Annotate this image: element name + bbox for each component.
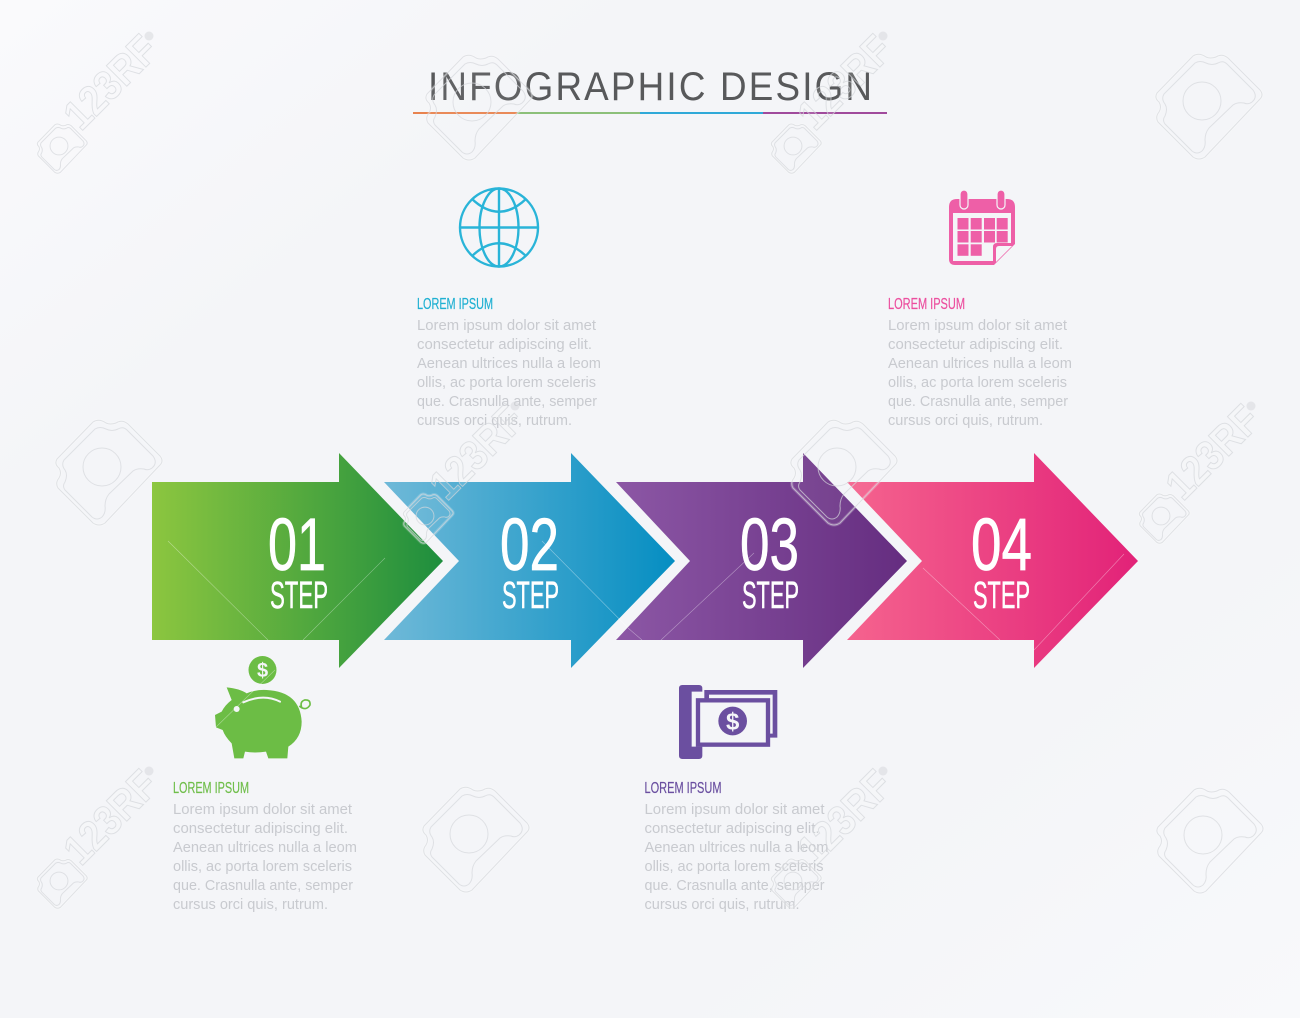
text block: step 02	[417, 296, 601, 429]
arrow: step 01: STEP	[270, 575, 328, 617]
text block: step 04: cursus orci quis, rutrum.	[888, 412, 1043, 429]
text block: step 03: ollis, ac porta lorem sceleris	[644, 858, 824, 875]
text block: step 02: ollis, ac porta lorem sceleris	[417, 374, 596, 391]
text block: step 04: ollis, ac porta lorem sceleris	[888, 374, 1067, 391]
text block: step 03: Lorem ipsum dolor sit amet	[644, 801, 825, 818]
text block: step 03	[644, 780, 828, 913]
arrow: step 02	[384, 453, 675, 668]
text block: step 04: LOREM IPSUM	[888, 296, 965, 313]
text block: step 01: consectetur adipiscing elit.	[173, 820, 348, 837]
arrow: step 01	[152, 453, 443, 668]
arrow: step 03: STEP	[742, 575, 799, 617]
text block: step 01	[173, 780, 357, 913]
icon: calendar	[949, 190, 1015, 265]
icon: piggy bank with coin: $	[257, 660, 268, 682]
text block: step 04: que. Crasnulla ante, semper	[888, 393, 1068, 410]
text block: step 02: que. Crasnulla ante, semper	[417, 393, 597, 410]
arrow: step 04	[847, 453, 1138, 668]
icon: banknotes	[679, 685, 777, 759]
text block: step 02: Aenean ultrices nulla a leom	[417, 355, 601, 372]
text block: step 03: Aenean ultrices nulla a leom	[644, 839, 828, 856]
arrow: step 03: 03	[740, 503, 799, 586]
text block: step 01: que. Crasnulla ante, semper	[173, 877, 353, 894]
text block: step 02: LOREM IPSUM	[417, 296, 493, 313]
title underline	[413, 112, 887, 114]
text block: step 01: Lorem ipsum dolor sit amet	[173, 801, 353, 818]
arrow: step 04: STEP	[973, 575, 1030, 617]
icon: globe	[460, 188, 538, 266]
text block: step 01: cursus orci quis, rutrum.	[173, 896, 328, 913]
arrow: step 02: STEP	[502, 575, 559, 617]
text block: step 01: ollis, ac porta lorem sceleris	[173, 858, 352, 875]
text block: step 03: cursus orci quis, rutrum.	[644, 896, 800, 913]
icon: piggy bank with coin	[215, 656, 310, 758]
arrow: step 03	[616, 453, 907, 668]
text block: step 01: LOREM IPSUM	[173, 780, 249, 797]
text block: step 04: consectetur adipiscing elit.	[888, 336, 1063, 353]
arrow: step 01: 01	[268, 503, 326, 586]
arrow: step 04: 04	[971, 503, 1032, 586]
text block: step 03: que. Crasnulla ante, semper	[644, 877, 825, 894]
text block: step 03: consectetur adipiscing elit.	[644, 820, 820, 837]
text block: step 04	[888, 296, 1072, 429]
text block: step 02: cursus orci quis, rutrum.	[417, 412, 572, 429]
text block: step 03: LOREM IPSUM	[644, 780, 722, 797]
icon: banknotes: $	[726, 709, 739, 736]
arrow: step 02: 02	[500, 503, 559, 586]
text block: step 04: Lorem ipsum dolor sit amet	[888, 317, 1068, 334]
text block: step 02: Lorem ipsum dolor sit amet	[417, 317, 597, 334]
text block: step 04: Aenean ultrices nulla a leom	[888, 355, 1072, 372]
title: INFOGRAPHIC DESIGN	[428, 65, 872, 109]
text block: step 02: consectetur adipiscing elit.	[417, 336, 592, 353]
text block: step 01: Aenean ultrices nulla a leom	[173, 839, 357, 856]
